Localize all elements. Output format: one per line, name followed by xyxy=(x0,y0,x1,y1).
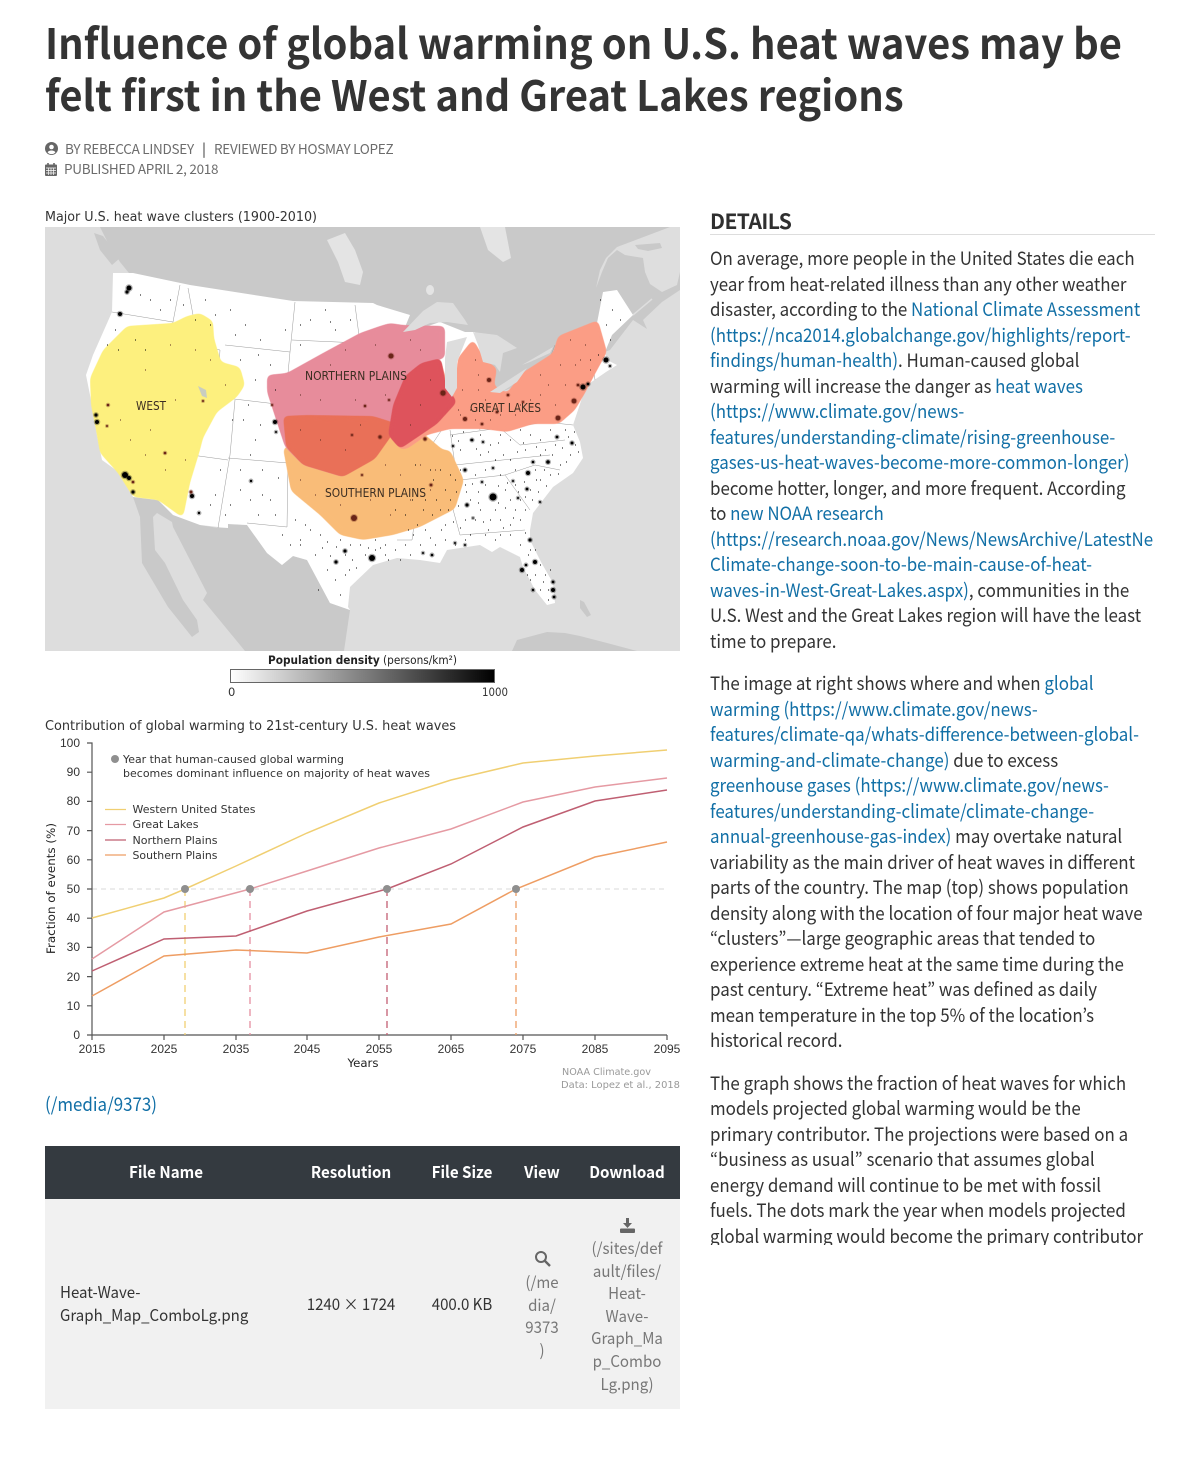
Bahamas xyxy=(580,600,591,617)
Canadian lakes xyxy=(327,227,511,295)
cell: file name xyxy=(60,1279,248,1326)
paragraph 2: warming (https://www.climate.gov/news- xyxy=(710,694,1038,722)
x axis title: Years xyxy=(346,1056,379,1070)
chart annotation xyxy=(111,753,430,780)
y tick labels xyxy=(60,736,80,1042)
paragraph 2: The image at right shows where and when global xyxy=(710,669,1094,696)
chart legend: Northern Plains xyxy=(132,834,218,847)
cell: view link: ) xyxy=(539,1337,545,1361)
chart credit: NOAA Climate.gov xyxy=(562,1067,651,1078)
state lines xyxy=(103,285,595,540)
Great Salt Lake xyxy=(198,386,207,398)
x tick labels: 2095 xyxy=(654,1042,680,1056)
cell: resolution: 1240 × 1724 xyxy=(307,1291,395,1315)
paragraph 3: The graph shows the fraction of heat waves for which xyxy=(710,1068,1126,1096)
paragraph 2: density along with the location of four major heat wave xyxy=(710,898,1143,926)
paragraph 1: time to prepare. xyxy=(710,626,836,654)
map region labels: SOUTHERN PLAINS xyxy=(325,486,426,500)
cell: download link: (/sites/def xyxy=(592,1235,662,1259)
cell: view link: (/me xyxy=(525,1269,559,1293)
paragraph 2: annual-greenhouse-gas-index) may overtake natural xyxy=(710,822,1122,849)
byline: | xyxy=(202,138,206,158)
chart legend: Western United States xyxy=(132,803,256,816)
paragraph 1: (https://research.noaa.gov/News/NewsArchive/LatestNe xyxy=(710,524,1153,552)
paragraph 2: parts of the country. The map (top) shows population xyxy=(710,873,1129,900)
x tick labels: 2085 xyxy=(582,1042,609,1056)
chart legend xyxy=(105,803,256,862)
header: view: View xyxy=(524,1159,560,1183)
y tick labels: 60 xyxy=(67,853,80,867)
paragraph 1: (https://www.climate.gov/news- xyxy=(710,397,964,424)
Northern Plains cluster xyxy=(267,323,445,477)
paragraph 2: features/climate-qa/whats-difference-between-global- xyxy=(710,720,1139,747)
paragraph 1: year from heat-related illness than any other weather xyxy=(710,270,1126,296)
paragraph 2: features/understanding-climate/climate-change- xyxy=(710,796,1094,824)
paragraph 3: “business as usual” scenario that assumes global xyxy=(710,1145,1095,1172)
Contiguous US xyxy=(86,273,633,610)
cell: download link: Lg.png) xyxy=(600,1371,654,1395)
paragraph 2: warming-and-climate-change) due to excess xyxy=(710,746,1058,772)
cell: file size: 400.0 KB xyxy=(432,1291,492,1315)
map region labels: WEST xyxy=(136,399,167,413)
paragraph 1: become hotter, longer, and more frequent. According xyxy=(710,474,1126,500)
header: file size: File Size xyxy=(432,1159,492,1183)
Canada land xyxy=(100,227,680,400)
x tick labels: 2075 xyxy=(510,1042,537,1056)
paragraph 2: variability as the main driver of heat waves in different xyxy=(710,848,1135,874)
chart heading: Contribution of global warming to 21st-century U.S. heat waves xyxy=(45,718,456,734)
y tick labels: 10 xyxy=(67,999,80,1013)
x tick labels: 2065 xyxy=(438,1042,465,1056)
Great Lakes cluster xyxy=(393,320,607,449)
map heading: Major U.S. heat wave clusters (1900-2010) xyxy=(45,209,317,225)
chart credit xyxy=(561,1067,680,1091)
scattered population dots xyxy=(107,295,621,600)
series: Western United States xyxy=(92,750,667,918)
series: Northern Plains xyxy=(92,790,667,971)
ocean xyxy=(45,227,680,651)
title: felt first in the West and Great Lakes regions xyxy=(45,63,904,124)
city clusters on heat regions xyxy=(106,354,579,521)
x tick labels: 2015 xyxy=(79,1042,106,1056)
title xyxy=(45,11,1122,124)
Southern Plains cluster xyxy=(283,433,464,540)
media link: (/media/9373) xyxy=(45,1090,157,1117)
cell: file name: Heat-Wave- xyxy=(60,1279,140,1303)
paragraph 3: fuels. The dots mark the year when models projected xyxy=(710,1196,1126,1223)
map xyxy=(45,227,680,651)
map region labels: NORTHERN PLAINS xyxy=(305,369,407,383)
details heading: DETAILS xyxy=(710,206,791,236)
legend max: 1000 xyxy=(482,685,508,699)
graphic: map and chart xyxy=(45,209,680,1091)
cell: download link xyxy=(591,1235,663,1395)
x tick labels: 2035 xyxy=(223,1042,250,1056)
legend bar xyxy=(230,670,494,682)
paragraph 2: “clusters”—large geographic areas that tended to xyxy=(710,924,1095,951)
icon: calendar xyxy=(45,163,57,176)
cell: view link xyxy=(525,1269,559,1361)
header: file name: File Name xyxy=(129,1159,203,1183)
series: Great Lakes xyxy=(92,778,667,959)
details heading xyxy=(710,208,1155,235)
plains overlap xyxy=(283,415,395,477)
y tick labels: 0 xyxy=(73,1028,80,1042)
byline xyxy=(45,138,393,158)
paragraph 1: findings/human-health). Human-caused global xyxy=(710,346,1079,373)
dashed drop lines xyxy=(185,889,516,1035)
Bay of Fundy xyxy=(633,299,652,315)
cell: download link: p_Combo xyxy=(593,1348,661,1372)
paragraph 1: gases-us-heat-waves-become-more-common-longer) xyxy=(710,448,1129,475)
paragraph 1: (https://nca2014.globalchange.gov/highlights/report- xyxy=(710,320,1131,348)
paragraph 1: Climate-change-soon-to-be-main-cause-of-heat- xyxy=(710,550,1092,577)
y tick labels: 20 xyxy=(67,970,80,984)
header: download: Download xyxy=(589,1159,665,1183)
paragraph 2: greenhouse gases (https://www.climate.gov/news- xyxy=(710,771,1109,798)
north and lakes overlap xyxy=(388,358,457,449)
threshold dots xyxy=(181,885,520,893)
map region labels: GREAT LAKES xyxy=(470,401,541,415)
icon: download xyxy=(620,1218,635,1233)
paragraph 1: U.S. West and the Great Lakes region will have the least xyxy=(710,601,1141,628)
x tick labels: 2055 xyxy=(366,1042,393,1056)
paragraph 3: energy demand will continue to be met with fossil xyxy=(710,1170,1101,1198)
icon: user xyxy=(45,142,58,155)
paragraph 3: primary contributor. The projections were based on a xyxy=(710,1120,1128,1146)
x tick labels: 2025 xyxy=(151,1042,178,1056)
Mexico land xyxy=(133,497,350,651)
series: Southern Plains xyxy=(92,842,667,996)
paragraph 1: waves-in-West-Great-Lakes.aspx), communities in the xyxy=(710,576,1129,602)
paragraph 1: disaster, according to the National Climate Assessment xyxy=(710,295,1140,322)
icon: magnifier xyxy=(535,1251,551,1267)
population density legend xyxy=(228,653,508,699)
axes xyxy=(87,743,667,1040)
cell: download link: Graph_Ma xyxy=(591,1325,663,1349)
title: Influence of global warming on U.S. heat waves may be xyxy=(45,11,1122,72)
chart credit: Data: Lopez et al., 2018 xyxy=(561,1080,680,1091)
y tick labels: 80 xyxy=(67,794,80,808)
cell: download link: Heat- xyxy=(608,1280,646,1304)
cell: file name: Graph_Map_ComboLg.png xyxy=(60,1302,248,1326)
paragraph 2: past century. “Extreme heat” was defined as daily xyxy=(710,975,1097,1002)
header: resolution: Resolution xyxy=(311,1159,391,1183)
chart annotation: becomes dominant influence on majority of heat waves xyxy=(123,767,430,780)
chart annotation: Year that human-caused global warming xyxy=(122,753,344,766)
y tick labels: 40 xyxy=(67,911,80,925)
paragraph 2: experience extreme heat at the same time during the xyxy=(710,950,1124,976)
byline: REVIEWED BY HOSMAY LOPEZ xyxy=(214,138,393,158)
scattered dots inside clusters xyxy=(120,340,591,515)
y tick labels: 50 xyxy=(67,882,80,896)
y tick labels: 30 xyxy=(67,940,80,954)
x tick labels xyxy=(79,1042,681,1056)
paragraph 3 xyxy=(710,1068,1144,1245)
y tick labels: 90 xyxy=(67,765,80,779)
table header xyxy=(45,1146,680,1199)
city clusters xyxy=(94,286,611,598)
cell: download link: Wave- xyxy=(606,1303,648,1327)
y tick labels: 100 xyxy=(60,736,80,750)
byline: BY REBECCA LINDSEY xyxy=(65,138,194,158)
chart legend: Great Lakes xyxy=(132,818,199,831)
threshold line xyxy=(92,888,667,890)
paragraph 2 xyxy=(710,669,1143,1053)
chart legend: Southern Plains xyxy=(132,849,218,862)
table body xyxy=(45,1199,680,1409)
Vancouver island xyxy=(94,233,120,265)
details text xyxy=(710,245,1153,1245)
paragraph 3: models projected global warming would be the xyxy=(710,1094,1081,1121)
Great Lakes xyxy=(403,302,553,397)
Anticosti island xyxy=(635,243,662,251)
y tick labels: 70 xyxy=(67,824,80,838)
Cuba xyxy=(512,632,637,651)
map region labels xyxy=(136,369,541,500)
line chart xyxy=(44,736,681,1091)
Gulf of St Lawrence xyxy=(596,227,680,292)
paragraph 2: historical record. xyxy=(710,1026,842,1053)
paragraph 1: warming will increase the danger as heat waves xyxy=(710,372,1083,398)
cell: view link: dia/ xyxy=(528,1292,556,1316)
x tick labels: 2045 xyxy=(294,1042,321,1056)
paragraph 1: to new NOAA research xyxy=(710,499,884,526)
West cluster xyxy=(90,313,245,518)
paragraph 2: mean temperature in the top 5% of the location’s xyxy=(710,1000,1094,1028)
publish date: PUBLISHED APRIL 2, 2018 xyxy=(64,158,218,178)
paragraph 1 xyxy=(710,245,1153,654)
paragraph 1: features/understanding-climate/rising-greenhouse- xyxy=(710,422,1115,450)
cell: download link: ault/files/ xyxy=(593,1258,661,1282)
legend min: 0 xyxy=(228,685,235,699)
legend title: Population density (persons/km²) xyxy=(268,653,457,667)
cell: view link: 9373 xyxy=(525,1314,559,1338)
